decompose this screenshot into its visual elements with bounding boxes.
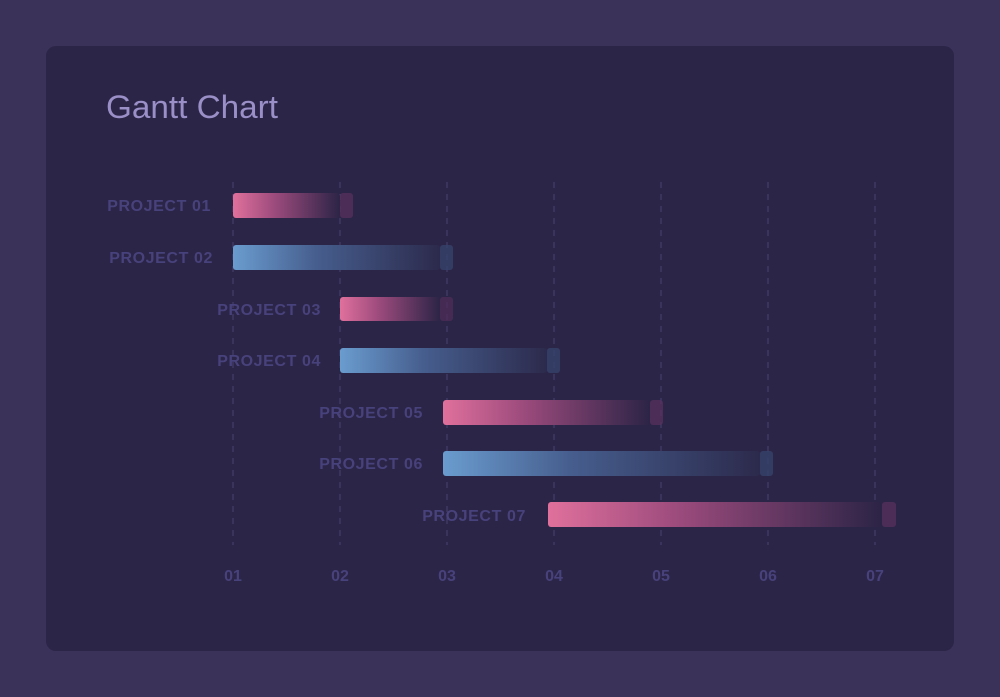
bars [233,193,896,527]
row labels: PROJECT 07 [422,508,526,525]
axis labels: 03 [438,568,456,585]
axis labels: 05 [652,568,670,585]
row labels: PROJECT 04 [217,353,321,370]
axis labels: 01 [224,568,242,585]
axis labels: 06 [759,568,777,585]
panel: chart card [46,46,954,651]
row labels: PROJECT 02 [109,250,213,267]
row labels [107,198,526,525]
row labels: PROJECT 03 [217,302,321,319]
axis labels: 02 [331,568,349,585]
axis labels: 07 [866,568,884,585]
title: Gantt Chart [106,89,278,125]
axis labels: 04 [545,568,563,585]
axis labels [224,568,884,585]
row labels: PROJECT 01 [107,198,211,215]
row labels: PROJECT 06 [319,456,423,473]
row labels: PROJECT 05 [319,405,423,422]
